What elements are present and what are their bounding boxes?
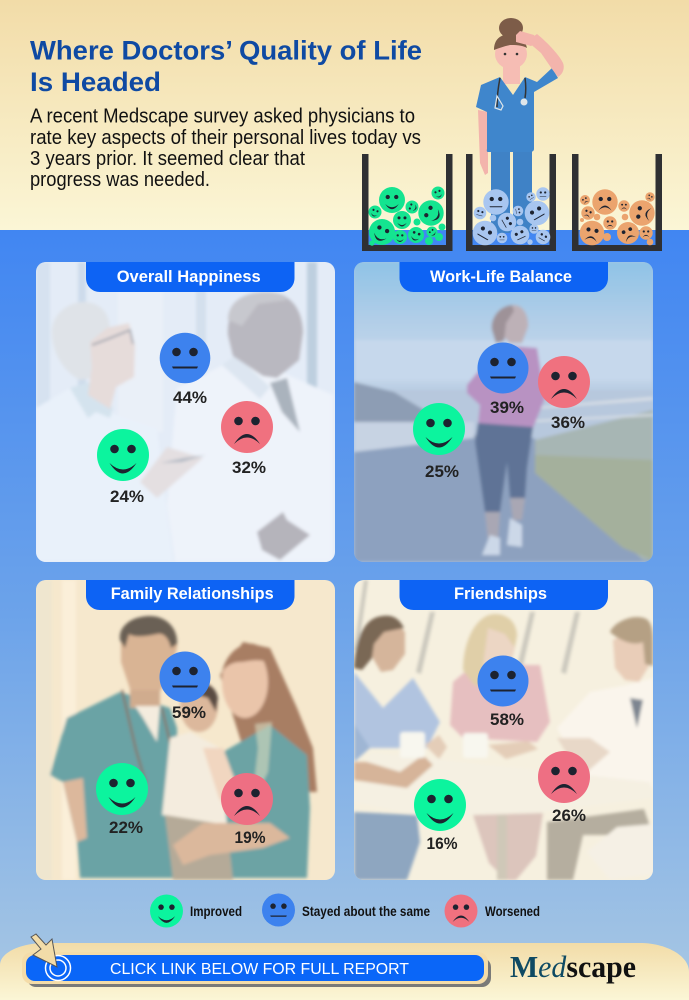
legend: worsened: Worsened (485, 903, 540, 919)
sad face 26% (538, 751, 590, 825)
panel: Family Relationships (36, 580, 335, 880)
bottom cream band (0, 943, 689, 1000)
header tab: Friendships (454, 585, 547, 603)
header tab: Family Relationships (111, 585, 274, 603)
header tab: Overall Happiness (117, 268, 261, 286)
happy face 16%: 16% (426, 835, 458, 853)
happy face 22%: 22% (109, 819, 143, 837)
neutral face 44% (160, 333, 210, 407)
legend: stayed about the same: Stayed about the same (302, 903, 430, 919)
sad face 19% (221, 773, 273, 847)
panel: Work-Life Balance (354, 262, 653, 562)
Medscape logo: Medscape (510, 949, 636, 984)
bin: blue neutral faces (466, 154, 556, 251)
intro text: progress was needed. (30, 169, 210, 191)
sad face 32% (221, 401, 273, 477)
blue background (0, 230, 689, 1000)
bin: orange sad faces (572, 154, 662, 251)
neutral face 39% (478, 342, 528, 417)
neutral face 44%: 44% (173, 389, 207, 407)
title (30, 36, 422, 97)
panel: Friendships (354, 580, 653, 880)
legend (150, 894, 540, 928)
call-to-action button (22, 934, 491, 987)
sad face 36%: 36% (551, 414, 585, 432)
icon: cursor click (31, 934, 70, 980)
legend: improved: Improved (190, 903, 242, 919)
title: Is Headed (30, 67, 161, 97)
panel: Overall Happiness (36, 262, 335, 562)
intro text: A recent Medscape survey asked physicians to (30, 106, 415, 128)
neutral face 39%: 39% (490, 399, 524, 417)
header tab: Work-Life Balance (430, 268, 572, 286)
header tab (400, 262, 608, 292)
neutral face 59% (160, 652, 210, 722)
neutral face 58%: 58% (490, 711, 524, 729)
intro text (30, 106, 421, 191)
legend: stayed about the same (262, 894, 430, 926)
happy face 16% (414, 779, 466, 853)
bin: green smiles (362, 154, 452, 251)
header tab (86, 580, 294, 610)
intro text: 3 years prior. It seemed clear that (30, 148, 305, 170)
happy face 25%: 25% (425, 463, 459, 481)
happy face 25% (413, 403, 465, 481)
top cream background (0, 0, 689, 231)
sad face 19%: 19% (234, 829, 266, 847)
legend: worsened (444, 894, 540, 928)
happy face 22% (96, 763, 148, 837)
intro text: rate key aspects of their personal lives today vs (30, 127, 421, 149)
header tab (86, 262, 294, 292)
photo: jogger on path (354, 262, 653, 562)
illustration: doctor figure (476, 18, 564, 233)
photo: family of doctors (36, 580, 317, 880)
sad face 32%: 32% (232, 459, 266, 477)
photo: two doctors (36, 262, 333, 562)
happy face 24% (97, 429, 149, 506)
sad face 26%: 26% (552, 807, 586, 825)
sad face 36% (538, 356, 590, 432)
call-to-action button: CLICK LINK BELOW FOR FULL REPORT (110, 961, 409, 978)
photo: doctors at table (354, 580, 653, 880)
header tab (400, 580, 608, 610)
happy face 24%: 24% (110, 488, 144, 506)
neutral face 58% (478, 656, 528, 729)
legend: improved (150, 894, 242, 928)
title: Where Doctors’ Quality of Life (30, 36, 422, 66)
neutral face 59%: 59% (172, 704, 206, 722)
